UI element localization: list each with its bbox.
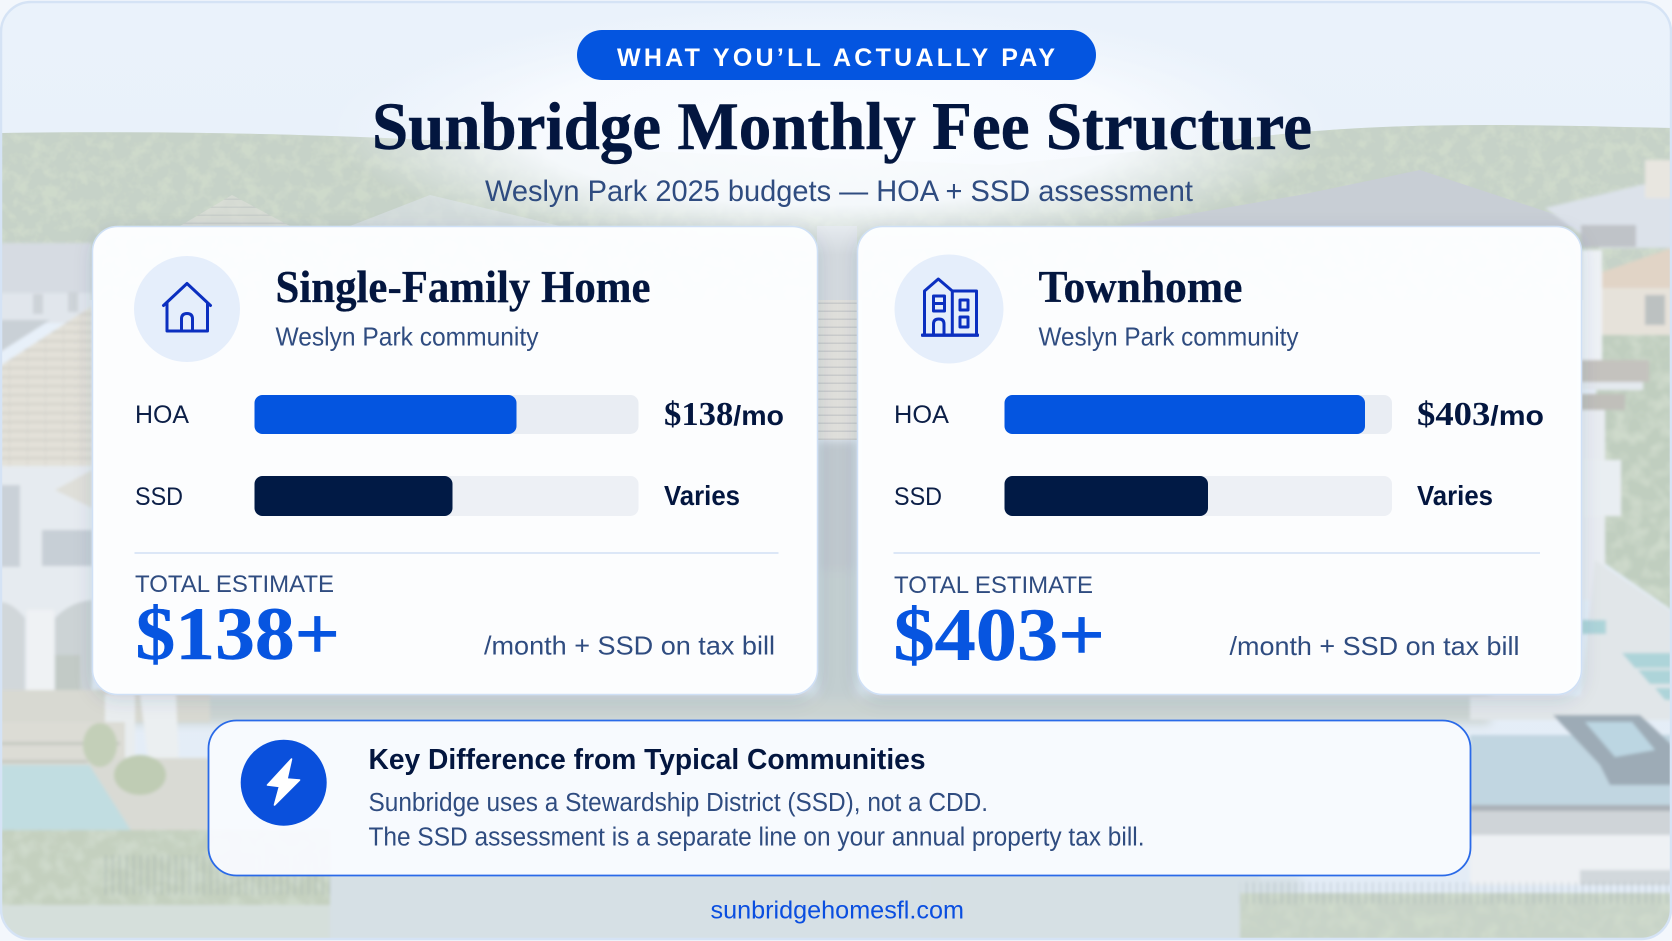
HOA row: HOA — [135, 401, 189, 429]
roofs centre — [180, 195, 290, 226]
icon: lightning bolt — [241, 740, 327, 826]
total estimate: $138+ — [136, 593, 340, 676]
callout heading: Key Difference from Typical Communities — [368, 744, 926, 776]
callout text: The SSD assessment is a separate line on your annual property tax bill. — [368, 824, 1144, 852]
callout: key difference — [208, 720, 1470, 876]
title: Sunbridge Monthly Fee Structure — [372, 88, 1312, 164]
card subheading: Weslyn Park community — [1038, 322, 1298, 352]
badge: what you'll actually pay — [577, 30, 1096, 80]
HOA row: HOA — [894, 401, 949, 429]
SSD row — [135, 476, 740, 516]
icon: townhome building — [894, 254, 1004, 364]
SSD row: SSD — [894, 483, 942, 511]
card heading: Single-Family Home — [276, 261, 650, 312]
callout text: Sunbridge uses a Stewardship District (SSD), not a CDD. — [368, 789, 988, 817]
SSD row: SSD — [135, 483, 183, 511]
HOA row: $138/mo — [664, 396, 784, 433]
total estimate: $403+ — [894, 594, 1105, 677]
SSD row: Varies — [664, 480, 740, 511]
footer url: sunbridgehomesfl.com — [710, 896, 964, 924]
total estimate: /month + SSD on tax bill — [1230, 631, 1520, 661]
subtitle: Weslyn Park 2025 budgets — HOA + SSD assessment — [485, 175, 1194, 208]
card heading: Townhome — [1038, 261, 1242, 312]
panel: townhome — [858, 226, 1582, 694]
badge: what you'll actually pay: WHAT YOU’LL ACTUALLY PAY — [617, 44, 1055, 72]
total estimate — [894, 572, 1520, 677]
trees — [0, 125, 1672, 300]
card subheading: Weslyn Park community — [276, 322, 538, 352]
SSD row — [894, 476, 1493, 516]
HOA row: $403/mo — [1417, 396, 1544, 433]
total estimate — [135, 571, 775, 676]
icon: house — [134, 256, 240, 362]
SSD row: Varies — [1417, 480, 1493, 511]
total estimate: TOTAL ESTIMATE — [135, 571, 334, 598]
left side — [0, 243, 92, 293]
HOA row — [894, 395, 1544, 434]
callout text — [368, 789, 1144, 852]
panel: single-family home — [92, 226, 818, 694]
center band under cards — [135, 440, 1491, 893]
total estimate: TOTAL ESTIMATE — [894, 572, 1093, 599]
right side — [1545, 180, 1672, 248]
total estimate: /month + SSD on tax bill — [484, 630, 775, 660]
HOA row — [135, 395, 784, 434]
